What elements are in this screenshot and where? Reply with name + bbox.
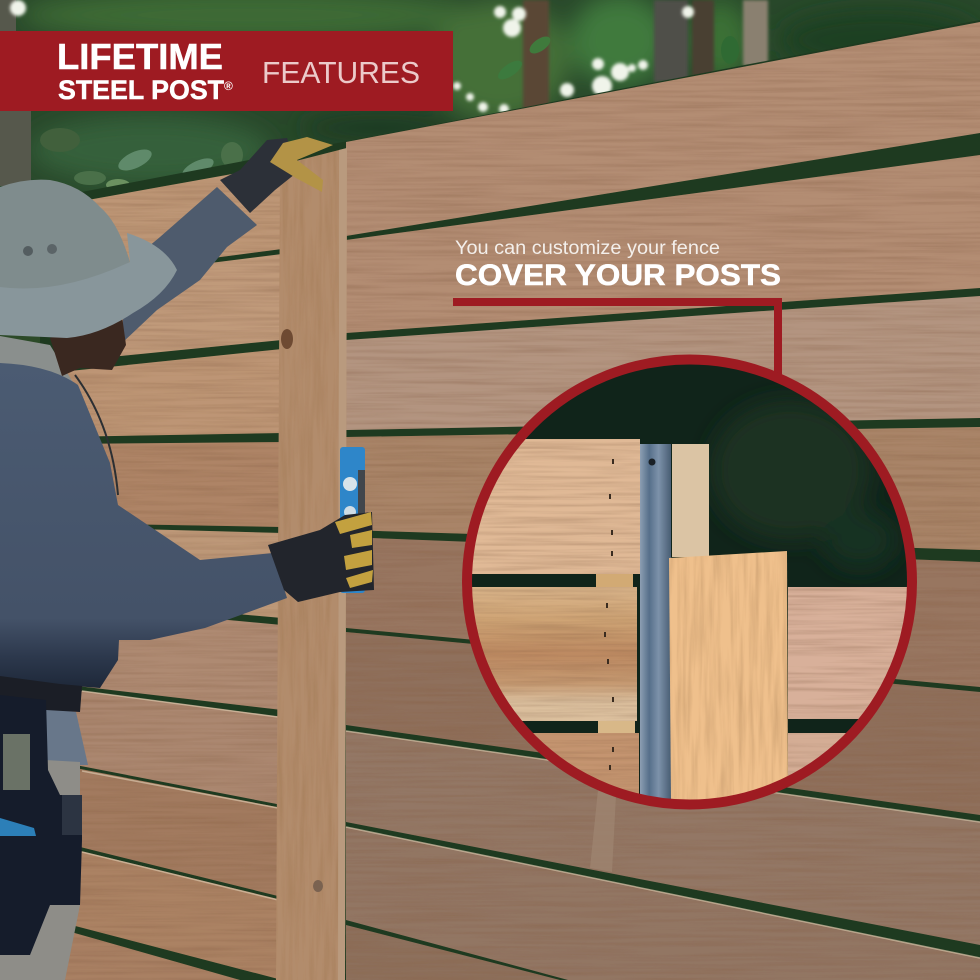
title: Lifetime Steel Post [57,36,233,105]
upper left board [455,439,640,574]
title: Lifetime Steel Post: STEEL POST [58,75,224,105]
wood stubs in gaps [596,574,633,587]
right boards [788,587,907,776]
red ring [467,360,912,804]
fence boards: right of post [346,22,980,980]
nail holes [604,459,614,770]
lower shirt [45,708,88,765]
wood post [276,148,347,980]
middle left board [455,587,637,721]
label: features: FEATURES [262,55,420,90]
pants [0,760,80,980]
pale board behind post [672,444,709,557]
tree trunks [0,0,768,186]
lower glove [268,512,374,602]
hood and neck [0,336,82,397]
bucket hat [0,180,177,338]
hood drawstring [75,375,118,495]
torso and lower arm [0,363,287,688]
background: trees and foliage [0,0,980,200]
raised arm [120,187,257,345]
face and beard [50,316,126,376]
title: Lifetime Steel Post: ® [224,79,233,93]
title: Lifetime Steel Post: LIFETIME [57,36,223,77]
pale top edges on lower boards [82,691,980,958]
steel post [640,444,671,799]
tool pouch [0,695,82,955]
vertical rail behind boards [590,790,616,872]
leaves [40,33,739,191]
blurred dark foliage [710,400,896,568]
callout heading: You can customize your fence [455,238,720,259]
belt [0,676,82,712]
worker [0,137,374,980]
callout heading: COVER YOUR POSTS [455,259,781,292]
bokeh highlights [10,0,694,114]
top glove [220,137,333,213]
fence boards: left of post [50,165,282,980]
callout heading [455,238,781,292]
blue torpedo level [340,447,365,593]
red connector line [453,302,778,375]
title banner [0,31,453,111]
detail circle: steel post close-up [455,360,912,813]
front board covering post [669,551,788,800]
lower left board [533,733,639,794]
